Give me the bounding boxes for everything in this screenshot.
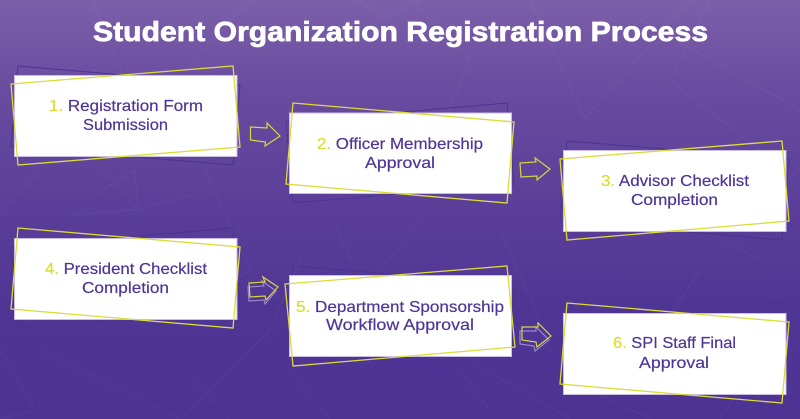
text: step 6 label [613,335,736,372]
text: step 3 label [601,173,750,209]
arrow: step 1 to 2 [250,123,280,146]
panel: step 6 [560,303,789,403]
text: step 5 label: Workflow Approval [326,317,474,334]
text: step 2 label: Approval [365,155,435,172]
text: step 1 label: Submission [83,117,168,134]
panel: step 3 [560,141,789,240]
text: step 3 label: 3. Advisor Checklist [601,173,750,190]
text: step 4 label: Completion [82,280,169,297]
panel: step 5 [285,266,515,366]
panel: step 1 [11,66,240,165]
title: Student Organization Registration Process [93,16,708,47]
arrow: step 4 to 5 [248,277,278,304]
text: step 1 label [49,98,203,134]
text: step 2 label: 2. Officer Membership [317,136,483,153]
text: step 4 label: 4. President Checklist [45,261,208,278]
text: step 5 label: 5. Department Sponsorship [296,299,504,316]
panel: step 4 [11,228,240,328]
panel: step 2 [286,103,514,203]
arrow: step 2 to 3 [520,158,550,180]
text: step 2 label [317,136,483,172]
text: step 6 label: 6. SPI Staff Final [613,335,736,352]
text: step 4 label [45,261,208,297]
text: step 1 label: 1. Registration Form [49,98,203,115]
arrow: step 5 to 6 [520,323,551,351]
text: step 3 label: Completion [631,192,718,209]
text: step 6 label: Approval [639,355,709,372]
text: step 5 label [296,299,504,334]
